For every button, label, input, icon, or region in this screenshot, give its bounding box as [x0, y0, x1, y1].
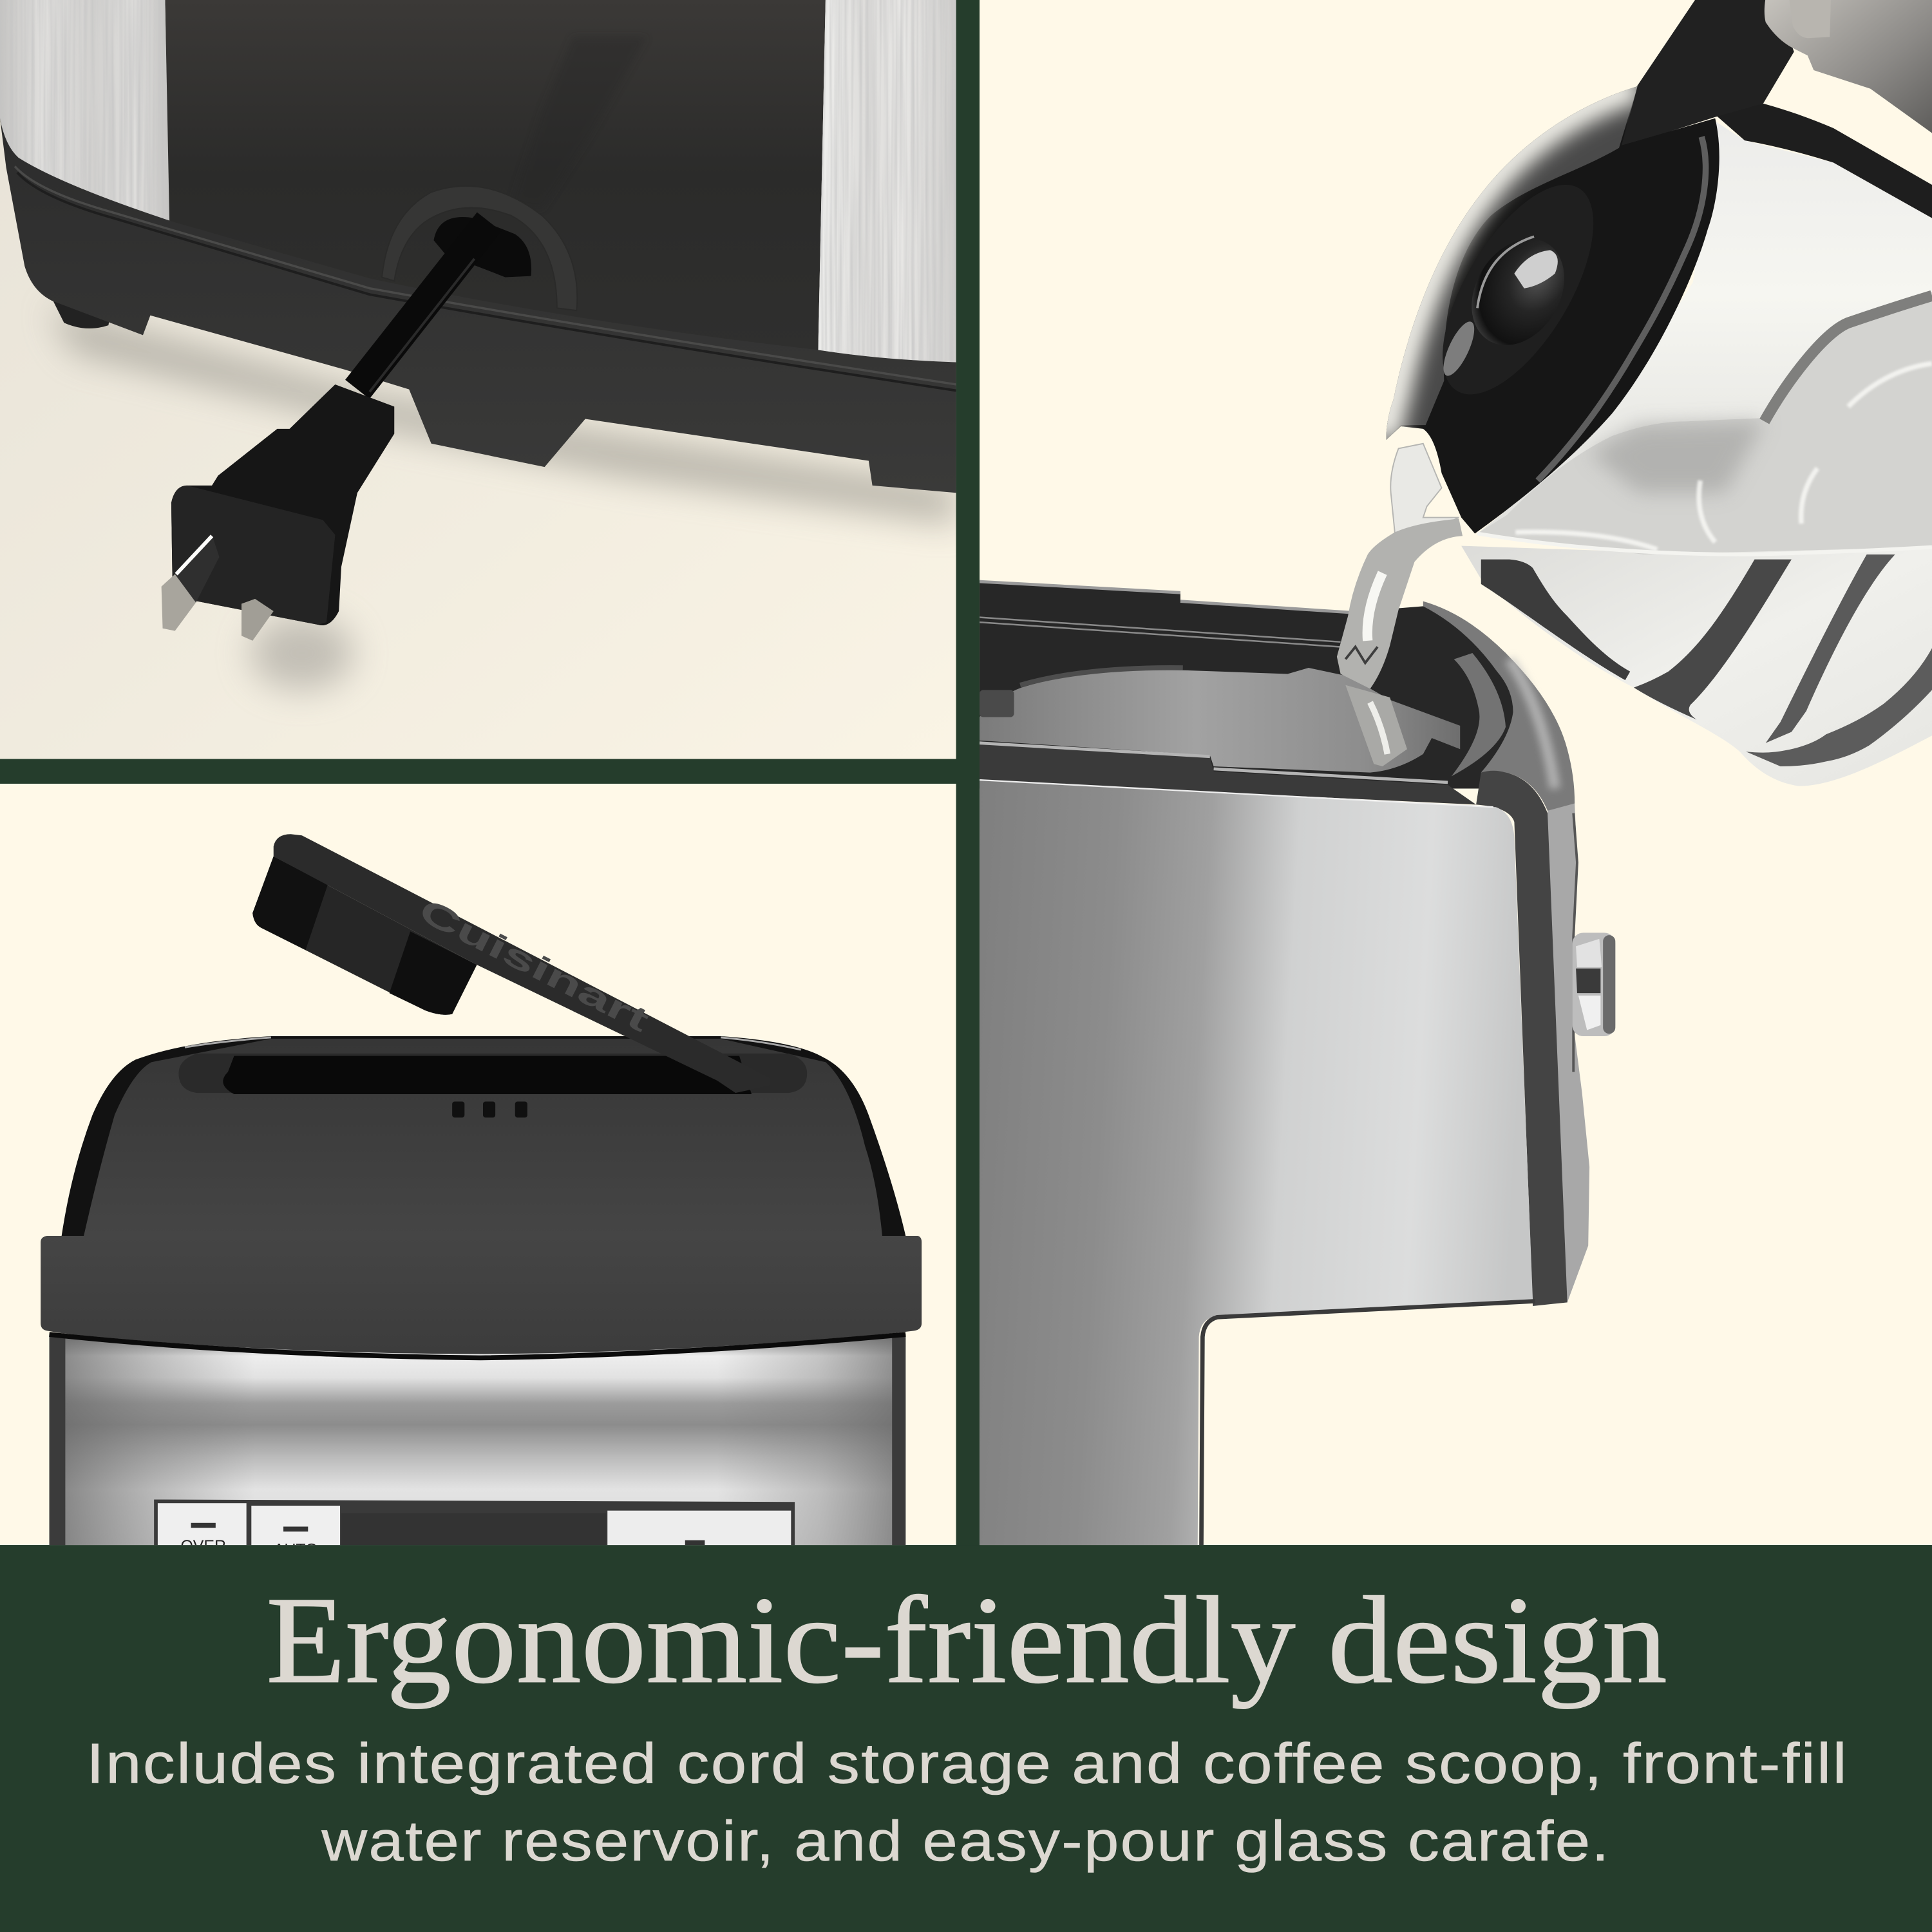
subtitle line one: Includes integrated cord storage and coffee scoop, front-fill — [86, 1731, 1848, 1795]
shadow of plug — [250, 616, 354, 690]
dark corner block — [1476, 771, 1567, 1306]
disc latch — [980, 690, 1014, 717]
disc arc edge — [1020, 668, 1183, 685]
right button — [607, 1511, 791, 1548]
title: Ergonomic-friendly design — [266, 1571, 1667, 1709]
reservoir inner lines — [980, 618, 1341, 647]
pouring water upper — [1390, 444, 1459, 537]
shoulder inner chrome strip — [1452, 653, 1506, 776]
thumbnail — [1789, 0, 1831, 38]
indicator dashes — [191, 1526, 705, 1542]
button AUTO — [251, 1506, 340, 1548]
base seam shadow — [17, 173, 956, 391]
carafe handle arm — [1715, 104, 1932, 218]
embossed brand on scoop: Cuisinart — [413, 891, 655, 1039]
center dark back panel — [165, 0, 826, 350]
dark front band — [980, 744, 1476, 804]
panel: pouring water — [980, 0, 1932, 1550]
bowl base band — [1746, 648, 1932, 766]
scoop handle — [274, 834, 770, 1093]
water band line — [1765, 296, 1932, 421]
carafe lower bowl — [1461, 546, 1932, 786]
panel top highlight — [980, 780, 1493, 807]
lid outer black edge — [62, 1036, 905, 1236]
brushed steel front — [50, 1334, 905, 1550]
control panel — [154, 1499, 795, 1559]
right brushed steel panel — [818, 0, 956, 362]
lid rim highlight — [1538, 137, 1706, 480]
water surface line — [1477, 533, 1932, 554]
steel brushing — [0, 0, 169, 220]
plug body — [171, 384, 394, 625]
water stream — [1337, 518, 1463, 689]
cord highlight — [370, 259, 475, 392]
bowl stripe three — [1766, 554, 1895, 743]
recess reflection — [1437, 317, 1481, 380]
glass carafe — [1337, 0, 1932, 786]
label AUTO: AUTO — [274, 1541, 317, 1559]
back water tone — [1477, 292, 1932, 554]
left prong highlight — [176, 536, 212, 574]
reservoir dark interior — [980, 582, 1528, 788]
hand — [1765, 0, 1932, 133]
right dark edge — [892, 1334, 905, 1550]
rim top light edge — [980, 582, 1349, 612]
panel: coffee scoop — [0, 784, 956, 1559]
cord channel on back panel — [511, 37, 647, 209]
side dark edge — [1573, 813, 1577, 1072]
right control side — [1548, 801, 1589, 1302]
cup dark side — [252, 857, 328, 950]
left prong shank — [175, 535, 220, 603]
lid knob dome — [1453, 222, 1583, 362]
curved chrome shoulder — [1423, 601, 1575, 811]
rear foot — [53, 301, 109, 328]
steel side panel — [980, 780, 1533, 1550]
lip highlights — [980, 743, 1448, 782]
water stream highlights — [1367, 573, 1383, 641]
front lid flap — [41, 1236, 922, 1354]
bowl left dark edge — [1481, 560, 1630, 680]
plug face — [171, 486, 335, 625]
shoulder light reflection — [1510, 659, 1555, 788]
knob facets — [1576, 939, 1602, 967]
subtitle line two: water reservoir, and easy-pour glass carafe. — [321, 1809, 1611, 1873]
front side shading — [50, 1334, 905, 1550]
appliance black base — [0, 118, 956, 493]
water stream dark specks — [1345, 647, 1378, 663]
cup right side — [390, 931, 477, 1015]
plug right prong — [242, 599, 274, 641]
scoop slot deep — [223, 1056, 752, 1094]
bowl stripe two — [1634, 560, 1792, 719]
lid corner highlights — [185, 1037, 801, 1050]
button OVER — [158, 1503, 247, 1548]
carafe handle — [1608, 0, 1794, 148]
display window — [341, 1513, 606, 1548]
gray water shadow — [1589, 421, 1765, 493]
scoop slot — [178, 1054, 807, 1093]
knob rim — [1603, 935, 1615, 1034]
scoop cup — [252, 857, 477, 1015]
lid pale outer edge — [1386, 86, 1638, 440]
left brushed steel panel — [0, 0, 169, 220]
cord hole — [433, 217, 531, 277]
carafe upper glass — [1477, 122, 1932, 554]
coffee maker side view — [980, 582, 1615, 1550]
stem dark edge — [1201, 1301, 1535, 1550]
power cord — [357, 222, 489, 390]
scoop — [252, 834, 770, 1093]
shadow under appliance base — [50, 308, 956, 524]
cord outlet arch — [382, 186, 577, 310]
water lower stream — [1345, 685, 1407, 766]
lid dome sheen — [1386, 86, 1638, 440]
plug left prong — [162, 574, 196, 631]
left dark edge — [50, 1334, 65, 1550]
label OVER: OVER — [180, 1537, 226, 1555]
water reflections — [1515, 363, 1932, 549]
water lower highlight — [1370, 703, 1387, 754]
gray reservoir disc — [980, 668, 1460, 773]
carafe lid — [1386, 86, 1719, 533]
base seam line — [15, 166, 956, 384]
knob highlight — [1514, 250, 1558, 289]
steel brushing — [818, 0, 956, 362]
panel: cord storage — [0, 0, 956, 759]
knob rim arc — [1477, 236, 1534, 308]
lid knob recess — [1413, 162, 1624, 417]
selector knob — [1572, 933, 1615, 1036]
lid vents — [452, 1101, 527, 1117]
lid top face — [84, 1039, 882, 1236]
bottom caption panel — [0, 1545, 1932, 1932]
flap shadow line — [50, 1334, 905, 1358]
